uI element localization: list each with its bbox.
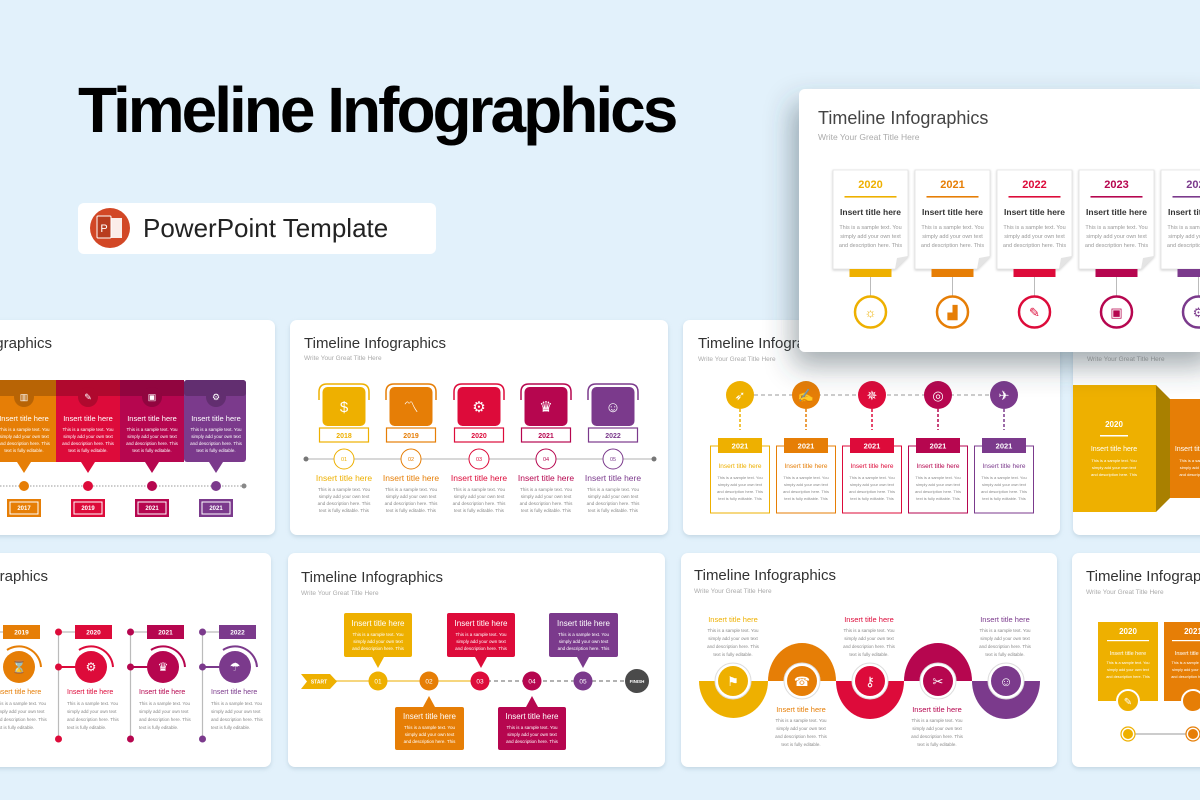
paper cards: This is a sample text. You <box>1003 225 1066 231</box>
year tabs: 2020 <box>86 630 101 636</box>
year tabs <box>3 625 256 639</box>
panel: featured slide (paper cards) <box>799 89 1200 352</box>
year boxes: text is fully editable. This <box>982 496 1026 501</box>
icon circles: ✈ <box>999 388 1010 403</box>
wave texts: Insert title here <box>844 615 894 624</box>
panel: slide G (semicircle wave): Timeline Infographics <box>694 567 836 584</box>
year boxes: Insert title here <box>916 463 960 470</box>
icon: powerpoint logo: P <box>100 223 108 235</box>
number timeline: This is a sample text. You <box>318 487 370 492</box>
icon boxes: ⚙ <box>472 399 486 416</box>
column bands: This is a sample text. You <box>190 427 242 432</box>
callouts: simply add your own text <box>353 639 404 644</box>
year boxes: simply add your own text <box>916 482 961 487</box>
number timeline: This is a sample text. You <box>385 487 437 492</box>
panel: slide F (start-finish callouts): Timeline Infographics <box>301 569 443 586</box>
paper cards: and description here. This <box>1085 243 1148 249</box>
callouts: This is a sample text. You <box>404 725 456 730</box>
panel: slide B (icon boxes with years): Timeline Infographics <box>304 335 446 352</box>
icon circles: ☼ <box>865 305 876 320</box>
main title: Timeline Infographics <box>78 74 676 146</box>
panel: slide H (year blocks) <box>1072 553 1200 767</box>
column bands: text is fully editable. <box>4 448 44 453</box>
column texts: Insert title here <box>139 689 185 696</box>
column bands: simply add your own text <box>0 434 50 439</box>
wave texts: and description here. This <box>911 734 964 739</box>
wave texts: and description here. This <box>707 644 760 649</box>
number timeline: 01 <box>341 457 347 463</box>
column bands: and description here. This <box>190 441 243 446</box>
panel: featured slide (paper cards): Write Your Great Title Here <box>818 132 920 142</box>
number timeline: Insert title here <box>585 473 641 483</box>
icon boxes: 〽 <box>403 399 419 416</box>
callouts: Insert title here <box>506 712 559 721</box>
wave texts: This is a sample text. You <box>707 628 759 633</box>
wave texts: Insert title here <box>912 705 962 714</box>
panel: slide B (icon boxes with years) <box>290 320 668 535</box>
wave texts: simply add your own text <box>776 726 827 731</box>
number timeline: This is a sample text. You <box>587 487 639 492</box>
wave: ☺ <box>999 674 1013 689</box>
wave <box>699 643 1040 719</box>
callouts: Insert title here <box>403 712 457 721</box>
number timeline: and description here. This <box>318 501 371 506</box>
wave: ⚷ <box>865 674 875 689</box>
icon boxes: 2019 <box>403 433 419 440</box>
callouts: and description here. This <box>352 646 405 651</box>
column bands: ▣ <box>148 392 156 402</box>
number timeline: This is a sample text. You <box>520 487 572 492</box>
column texts: and description here. This <box>211 717 263 722</box>
circles: ⚙ <box>86 660 96 674</box>
column texts: simply add your own text <box>139 709 189 714</box>
paper cards: 2021 <box>940 179 965 191</box>
wave texts: text is fully editable. <box>917 742 957 747</box>
wave texts: Insert title here <box>708 615 758 624</box>
column bands: and description here. This <box>126 441 179 446</box>
column texts: and description here. This <box>67 717 119 722</box>
number timeline: and description here. This <box>520 501 573 506</box>
paper cards: simply add your own text <box>922 234 983 240</box>
column bands: text is fully editable. <box>68 448 108 453</box>
panel: slide H (year blocks): and description here. This <box>1106 675 1150 679</box>
dotted timeline: 2019 <box>81 506 95 512</box>
icon: powerpoint logo <box>90 208 130 248</box>
panel: slide D (3D blocks): This is a sample text. You <box>1091 458 1137 463</box>
panel: slide D (3D blocks): Insert title here <box>1091 446 1137 453</box>
column bands: Insert title here <box>0 414 49 423</box>
panel: slide F (start-finish callouts) <box>288 553 665 767</box>
panel: slide C (circles with year boxes): Timeline Infographics <box>698 335 840 352</box>
paper cards: Insert title here <box>922 207 983 217</box>
icon circles: ➶ <box>735 388 745 403</box>
column bands: Insert title here <box>127 414 177 423</box>
badge: PowerPoint Template <box>78 203 436 254</box>
wave texts: text is fully editable. <box>985 652 1025 657</box>
wave texts <box>707 615 1032 747</box>
wave texts: simply add your own text <box>844 636 895 641</box>
paper cards: and description here. This <box>839 243 902 249</box>
column bands: text is fully editable. <box>132 448 172 453</box>
icon circles: ✎ <box>1029 305 1040 320</box>
wave texts: This is a sample text. You <box>979 628 1031 633</box>
icon circles: ✍ <box>798 388 814 403</box>
column texts <box>0 689 263 730</box>
callouts: This is a sample text. You <box>455 632 507 637</box>
paper cards: This is a sample text. You <box>921 225 984 231</box>
year boxes: This is a sample text. You <box>717 475 763 480</box>
icon boxes: ☺ <box>605 399 621 416</box>
column bands: Insert title here <box>191 414 241 423</box>
year boxes: This is a sample text. You <box>783 475 829 480</box>
callouts: and description here. This <box>404 739 456 744</box>
icon circles: ✵ <box>867 388 878 403</box>
number timeline: text is fully editable. This <box>588 508 639 513</box>
icon circles <box>726 381 1018 409</box>
panel: slide D (3D blocks): Write Your Great Title Here <box>1087 356 1165 363</box>
circles: ♛ <box>158 660 168 674</box>
paper cards: This is a sample text. You <box>839 225 902 231</box>
wave texts: simply add your own text <box>912 726 963 731</box>
column texts: This is a sample text. You <box>139 701 191 706</box>
callouts: Insert title here <box>455 619 508 628</box>
callouts: This is a sample text. You <box>352 632 404 637</box>
panel: slide H (year blocks): Insert title here <box>1110 651 1146 657</box>
callouts: and description here. This <box>455 646 508 651</box>
year boxes: 2021 <box>930 442 946 450</box>
panel: slide A (banner columns) <box>0 320 275 535</box>
year boxes: This is a sample text. You <box>981 475 1027 480</box>
number timeline: simply add your own text <box>454 494 505 499</box>
number timeline: 03 <box>476 457 482 463</box>
number timeline: Insert title here <box>383 473 439 483</box>
number timeline: text is fully editable. This <box>386 508 437 513</box>
paper cards: simply add your own text <box>1086 234 1147 240</box>
paper cards: simply add your own text <box>840 234 901 240</box>
year boxes: Insert title here <box>784 463 828 470</box>
wave texts: text is fully editable. <box>781 742 821 747</box>
callouts: and description here. This <box>558 646 610 651</box>
callouts: simply add your own text <box>405 732 455 737</box>
column texts: This is a sample text. You <box>211 701 263 706</box>
paper cards: simply add your own text <box>1004 234 1065 240</box>
panel: slide D (3D blocks): simply add your own text <box>1092 465 1137 470</box>
number timeline: Insert title here <box>451 473 507 483</box>
paper cards: Insert title here <box>1004 207 1065 217</box>
paper cards: and description here. This <box>1003 243 1066 249</box>
wave texts: and description here. This <box>843 644 896 649</box>
number timeline: simply add your own text <box>386 494 437 499</box>
year boxes <box>710 438 1034 513</box>
column bands: This is a sample text. You <box>62 427 114 432</box>
icon boxes: $ <box>340 399 349 416</box>
column texts: Insert title here <box>211 689 257 696</box>
column texts: text is fully editable. <box>211 725 250 730</box>
column bands: and description here. This <box>62 441 115 446</box>
wave texts: Insert title here <box>776 705 826 714</box>
column bands: ✎ <box>84 392 92 402</box>
dotted timeline: 2021 <box>209 506 223 512</box>
column texts: text is fully editable. <box>139 725 178 730</box>
panel: slide G (semicircle wave): Write Your Great Title Here <box>694 588 772 595</box>
number timeline: 05 <box>610 457 616 463</box>
dotted timeline <box>0 481 246 517</box>
panel: slide H (year blocks): simply add your own text <box>1107 668 1150 672</box>
wave: ⚑ <box>727 674 739 689</box>
callouts: simply add your own text <box>456 639 507 644</box>
number timeline: This is a sample text. You <box>453 487 505 492</box>
icon boxes <box>319 384 638 442</box>
panel: slide D (3D blocks): and description here. This <box>1091 472 1137 477</box>
timeline: FINISH <box>630 679 644 684</box>
timeline: 05 <box>579 678 587 686</box>
callouts <box>344 613 618 750</box>
callouts: Insert title here <box>352 619 405 628</box>
circles: ⌛ <box>12 660 26 674</box>
callouts: simply add your own text <box>507 732 558 737</box>
panel: slide F (start-finish callouts): Write Your Great Title Here <box>301 590 379 597</box>
icon circles: ◎ <box>932 388 944 403</box>
wave texts: This is a sample text. You <box>843 628 895 633</box>
panel: slide H (year blocks): This is a sample text. You <box>1106 661 1150 665</box>
number timeline: and description here. This <box>385 501 438 506</box>
wave texts: text is fully editable. <box>713 652 753 657</box>
number timeline: and description here. This <box>453 501 506 506</box>
icon boxes: 2020 <box>471 433 487 440</box>
wave texts: text is fully editable. <box>849 652 889 657</box>
year boxes: This is a sample text. You <box>915 475 961 480</box>
year tabs: 2019 <box>14 630 29 636</box>
column texts: simply add your own text <box>67 709 117 714</box>
year tabs: 2022 <box>230 630 245 636</box>
column texts: simply add your own text <box>211 709 261 714</box>
year boxes: and description here. This <box>717 489 763 494</box>
wave texts: and description here. This <box>775 734 828 739</box>
year boxes: and description here. This <box>915 489 961 494</box>
number timeline: 04 <box>543 457 549 463</box>
year boxes: simply add your own text <box>784 482 829 487</box>
column texts: Insert title here <box>67 689 113 696</box>
paper cards: 2022 <box>1022 179 1047 191</box>
panel: slide C (circles with year boxes) <box>683 320 1060 535</box>
icon boxes: ♛ <box>539 399 553 416</box>
column bands: text is fully editable. <box>196 448 236 453</box>
icon boxes: 2022 <box>605 433 621 440</box>
number timeline <box>304 449 656 513</box>
year boxes: simply add your own text <box>850 482 895 487</box>
year boxes: simply add your own text <box>982 482 1027 487</box>
column bands <box>0 380 246 473</box>
wave texts: Insert title here <box>980 615 1030 624</box>
callouts: Insert title here <box>557 619 611 628</box>
circles <box>0 628 257 742</box>
icon circles: ▟ <box>946 304 958 321</box>
year boxes: Insert title here <box>982 463 1026 470</box>
callouts: This is a sample text. You <box>506 725 558 730</box>
year boxes: text is fully editable. This <box>784 496 828 501</box>
timeline <box>301 669 649 693</box>
year boxes: and description here. This <box>981 489 1027 494</box>
paper cards: 2023 <box>1104 179 1129 191</box>
column bands: simply add your own text <box>191 434 242 439</box>
paper cards: and description here. This <box>921 243 984 249</box>
wave: ✂ <box>933 674 944 689</box>
column bands: ⚙ <box>212 392 220 402</box>
timeline: 01 <box>374 678 382 686</box>
year boxes: Insert title here <box>718 463 762 470</box>
column bands: simply add your own text <box>63 434 114 439</box>
year boxes: This is a sample text. You <box>849 475 895 480</box>
panel: slide H (year blocks): ✎ <box>1124 697 1132 708</box>
wave texts: This is a sample text. You <box>911 718 963 723</box>
panel: slide G (semicircle wave) <box>681 553 1057 767</box>
wave texts: and description here. This <box>979 644 1032 649</box>
year tabs: 2021 <box>158 630 173 636</box>
callouts: This is a sample text. You <box>558 632 610 637</box>
circles: ☂ <box>230 660 241 674</box>
dotted timeline: 2021 <box>145 506 159 512</box>
column bands: This is a sample text. You <box>126 427 178 432</box>
wave texts: simply add your own text <box>980 636 1031 641</box>
panel: slide C (circles with year boxes): Write Your Great Title Here <box>698 356 776 363</box>
number timeline: text is fully editable. This <box>319 508 370 513</box>
column texts: This is a sample text. You <box>67 701 119 706</box>
year boxes: 2021 <box>996 442 1012 450</box>
year boxes: text is fully editable. This <box>916 496 960 501</box>
year boxes: and description here. This <box>783 489 829 494</box>
timeline: 02 <box>425 678 433 686</box>
number timeline: Insert title here <box>316 473 372 483</box>
year boxes: and description here. This <box>849 489 895 494</box>
paper cards: Insert title here <box>1086 207 1147 217</box>
column bands: This is a sample text. You <box>0 427 50 432</box>
number timeline: Insert title here <box>518 473 574 483</box>
icon circles <box>850 269 1200 328</box>
column bands: ▥ <box>20 392 28 402</box>
paper cards: Insert title here <box>840 207 901 217</box>
number timeline: simply add your own text <box>588 494 639 499</box>
icon boxes: 2018 <box>336 433 352 440</box>
icon circles: ▣ <box>1110 305 1123 320</box>
year boxes: text is fully editable. This <box>850 496 894 501</box>
number timeline: simply add your own text <box>319 494 370 499</box>
number timeline: 02 <box>408 457 414 463</box>
callouts: and description here. This <box>506 739 559 744</box>
year boxes: 2021 <box>732 442 748 450</box>
number timeline: text is fully editable. This <box>454 508 505 513</box>
year boxes: 2021 <box>864 442 880 450</box>
icon boxes: 2021 <box>538 433 554 440</box>
timeline: 04 <box>528 678 536 686</box>
number timeline: and description here. This <box>587 501 640 506</box>
paper cards <box>833 170 1200 269</box>
year boxes: 2021 <box>798 442 814 450</box>
wave: ☎ <box>794 674 810 689</box>
number timeline: text is fully editable. This <box>521 508 572 513</box>
panel: slide H (year blocks): 2020 <box>1119 627 1137 636</box>
column texts: text is fully editable. <box>67 725 106 730</box>
column bands: Insert title here <box>63 414 113 423</box>
column texts: and description here. This <box>139 717 191 722</box>
number timeline: simply add your own text <box>521 494 572 499</box>
panel: slide D (3D blocks): 2020 <box>1105 420 1123 429</box>
badge: PowerPoint Template: PowerPoint Template <box>143 213 388 243</box>
year boxes: simply add your own text <box>718 482 763 487</box>
wave texts: This is a sample text. You <box>775 718 827 723</box>
panel: slide B (icon boxes with years): Write Your Great Title Here <box>304 355 382 362</box>
panel: slide E (vertical line columns) <box>0 553 271 767</box>
paper cards: 2020 <box>858 179 883 191</box>
wave texts: simply add your own text <box>708 636 759 641</box>
dotted timeline: 2017 <box>17 506 31 512</box>
panel: slide H (year blocks): Write Your Great Title Here <box>1086 589 1164 596</box>
year boxes: Insert title here <box>850 463 894 470</box>
year boxes: text is fully editable. This <box>718 496 762 501</box>
column bands: simply add your own text <box>127 434 178 439</box>
timeline: START <box>311 680 327 686</box>
timeline: 03 <box>476 678 484 686</box>
paper cards: This is a sample text. You <box>1085 225 1148 231</box>
panel: featured slide (paper cards): Timeline Infographics <box>818 108 988 128</box>
panel: slide D (3D blocks) <box>1073 320 1200 535</box>
callouts: simply add your own text <box>559 639 609 644</box>
